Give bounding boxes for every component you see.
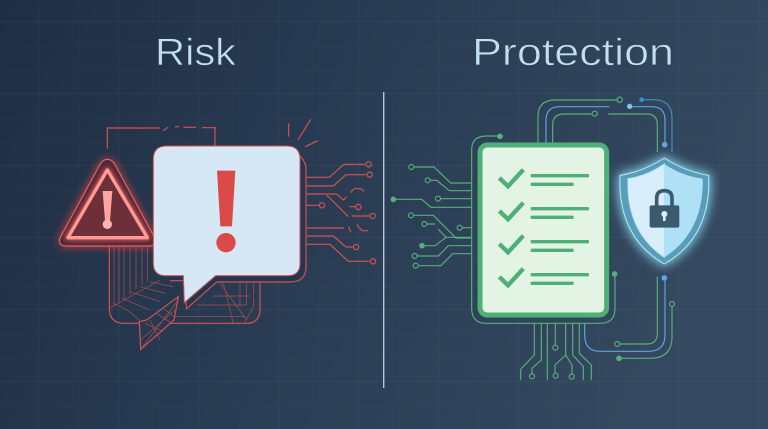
bottom circuit traces xyxy=(521,323,591,380)
checklist card xyxy=(480,145,607,315)
icon: shield with padlock xyxy=(620,158,709,264)
back bubble edge xyxy=(170,153,306,309)
icon: exclamation mark xyxy=(216,171,236,252)
title: Risk: Risk xyxy=(155,32,237,74)
lower right circuit traces xyxy=(472,150,674,358)
checklist rows xyxy=(499,170,589,285)
panel: risk xyxy=(60,119,376,349)
panel: protection xyxy=(390,97,709,380)
right side circuit traces xyxy=(307,162,376,264)
left circuit traces xyxy=(396,164,472,268)
back speech bubble with web lines xyxy=(109,243,260,349)
center divider xyxy=(383,92,384,388)
top red circuit trace xyxy=(107,119,318,149)
upper circuit traces xyxy=(472,97,657,152)
blue circuit traces xyxy=(546,100,672,351)
speech bubble xyxy=(153,146,300,303)
title: Protection: Protection xyxy=(472,32,674,74)
icon: warning triangle xyxy=(60,159,155,246)
